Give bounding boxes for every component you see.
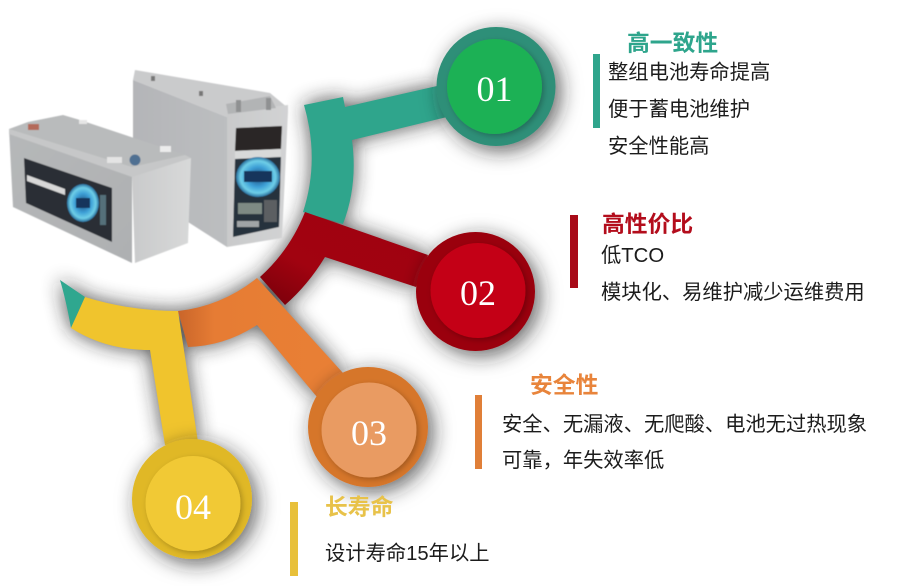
- heading 2: 高性价比: [602, 211, 693, 237]
- text block 1: 便于蓄电池维护: [608, 98, 750, 121]
- circle 01: [436, 27, 556, 146]
- ring arm: teal to circle 01: [303, 86, 447, 224]
- ring arm: yellow to circle 04: [71, 297, 198, 445]
- text block 1: 整组电池寿命提高: [608, 61, 770, 84]
- battery: tall: [133, 70, 288, 247]
- text block 2: 低TCO: [601, 244, 664, 267]
- text block 3: [502, 413, 867, 472]
- heading 1: 高一致性: [627, 30, 718, 56]
- circle 02: [416, 232, 535, 351]
- panel 4: long life: [290, 494, 490, 576]
- soft shadow under the ring: [60, 86, 447, 443]
- circle 02: 02: [460, 273, 496, 313]
- circle 03: 03: [351, 413, 387, 453]
- text block 2: 模块化、易维护减少运维费用: [601, 281, 865, 304]
- accent bar 4: [290, 502, 298, 576]
- panel 3: safety: [475, 372, 867, 472]
- heading 4: 长寿命: [325, 494, 394, 520]
- text block 3: 可靠，年失效率低: [502, 449, 664, 472]
- circle 01: 01: [476, 69, 512, 109]
- text block 4: 设计寿命15年以上: [325, 542, 490, 565]
- panel 2: cost performance: [570, 211, 865, 304]
- circle 03: [308, 367, 428, 487]
- ring arm: orange to circle 03: [178, 278, 343, 397]
- panel 1: high consistency: [593, 30, 770, 158]
- accent bar 3: [475, 395, 482, 469]
- battery: wide: [9, 115, 191, 263]
- accent bar 1: [593, 54, 600, 128]
- ring arm: teal tip: [60, 280, 85, 328]
- text block 3: 安全、无漏液、无爬酸、电池无过热现象: [502, 413, 867, 436]
- text block 1: 安全性能高: [608, 135, 709, 158]
- circle 04: 04: [175, 487, 211, 527]
- circle 04: [132, 439, 252, 559]
- ring arm: red to circle 02: [260, 212, 428, 305]
- text block 1: [608, 61, 770, 158]
- text block 2: [601, 244, 865, 304]
- product image: two batteries: [9, 70, 288, 263]
- accent bar 2: [570, 215, 578, 288]
- heading 3: 安全性: [530, 372, 598, 398]
